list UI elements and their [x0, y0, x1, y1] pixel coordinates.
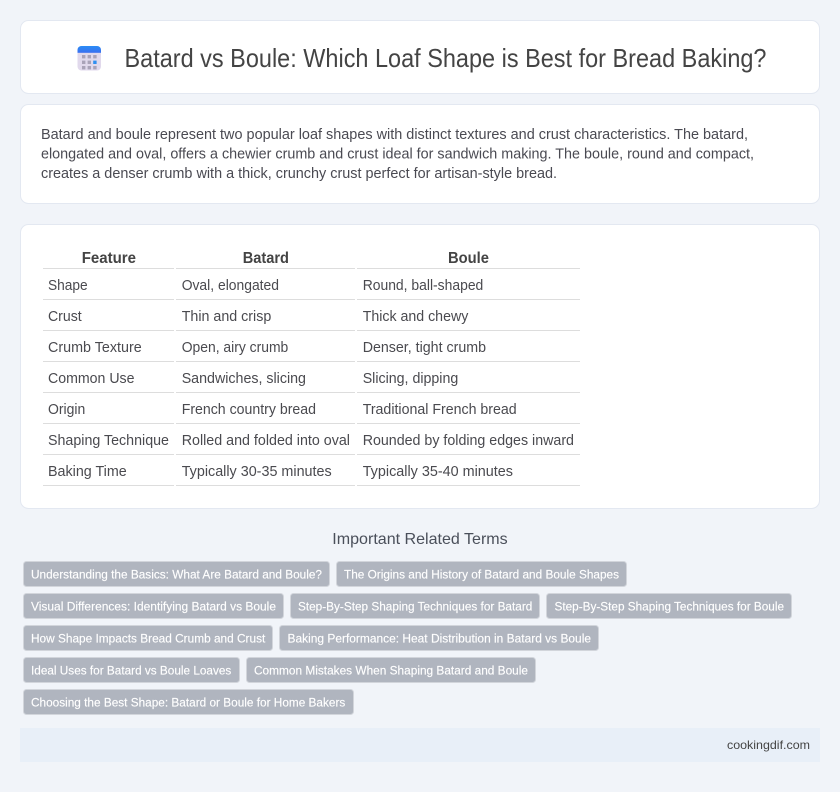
- table row: Crumb Texture: Open, airy crumb: [182, 340, 288, 356]
- table row: Crust: Thick and chewy: [363, 309, 469, 325]
- tag: Origins and History: [336, 562, 626, 586]
- panel: title header: [20, 20, 820, 94]
- table row: Crust: [43, 309, 580, 331]
- tag: Ideal Uses: [24, 658, 240, 682]
- tag: Understanding the Basics: Understanding the Basics: What Are Batard and Boule?: [31, 567, 322, 581]
- tag: Shaping Techniques for Batard: [290, 594, 540, 618]
- table row: Crumb Texture: [43, 340, 580, 362]
- tag: Baking Performance: Baking Performance: Heat Distribution in Batard vs Boule: [288, 631, 591, 645]
- tag: Shaping Techniques for Batard: Step-By-Step Shaping Techniques for Batard: [298, 599, 532, 613]
- heading: Important Related Terms: Important Related Terms: [332, 531, 508, 548]
- table row: Baking Time: Typically 30-35 minutes: [182, 464, 332, 480]
- tag: Baking Performance: [280, 626, 598, 650]
- description text: [41, 127, 754, 182]
- table row: Shaping Technique: Shaping Technique: [48, 433, 169, 449]
- table row: Shaping Technique: Rounded by folding edges inward: [363, 433, 574, 449]
- table row: Crust: Crust: [48, 309, 82, 325]
- tag: Visual Differences: Visual Differences: Identifying Batard vs Boule: [31, 599, 276, 613]
- table row: Shape: [43, 278, 580, 300]
- footer: cookingdif.com: [727, 738, 810, 752]
- table row: Origin: [43, 402, 580, 424]
- table header row: Batard: [243, 250, 289, 267]
- tag: Choosing the Best Shape: [24, 690, 354, 714]
- tag: Shaping Techniques for Boule: [546, 594, 792, 618]
- tag: Understanding the Basics: [24, 562, 330, 586]
- table row: Shaping Technique: [43, 433, 580, 455]
- table row: Shape: Oval, elongated: [182, 278, 279, 294]
- table row: Origin: Traditional French bread: [363, 402, 517, 418]
- icon: calendar: [78, 46, 101, 70]
- table row: Baking Time: Baking Time: [48, 464, 127, 480]
- table header row: Feature: [82, 250, 136, 267]
- panel: description: [20, 104, 820, 204]
- description text: creates a denser crumb with a thick, crunchy crust perfect for artisan-style bread.: [41, 166, 557, 182]
- tag: Origins and History: The Origins and History of Batard and Boule Shapes: [344, 567, 619, 581]
- table row: Baking Time: [43, 464, 580, 486]
- tag: Ideal Uses: Ideal Uses for Batard vs Boule Loaves: [31, 663, 231, 677]
- title: Batard vs Boule: Which Loaf Shape is Best for Bread Baking?: [124, 45, 766, 73]
- table row: Origin: French country bread: [182, 402, 316, 418]
- tag: Shaping Techniques for Boule: Step-By-Step Shaping Techniques for Boule: [554, 599, 784, 613]
- tag: Shape Impacts: How Shape Impacts Bread Crumb and Crust: [31, 631, 266, 645]
- table row: Shaping Technique: Rolled and folded into oval: [182, 433, 350, 449]
- table header row: Boule: [448, 250, 489, 267]
- table row: Shape: Round, ball-shaped: [363, 278, 483, 294]
- table row: Common Use: Sandwiches, slicing: [182, 371, 306, 387]
- panel: related terms tags: [24, 562, 792, 714]
- table row: Origin: Origin: [48, 402, 85, 418]
- table row: Crust: Thin and crisp: [182, 309, 271, 325]
- tag: Common Mistakes: Common Mistakes When Shaping Batard and Boule: [254, 663, 528, 677]
- table row: Shape: Shape: [48, 278, 88, 294]
- tag: Visual Differences: [24, 594, 284, 618]
- table row: Crumb Texture: Denser, tight crumb: [363, 340, 486, 356]
- footer: [20, 728, 820, 762]
- description text: elongated and oval, offers a chewier crumb and crust ideal for sandwich making. The boule, round and compact,: [41, 146, 754, 162]
- table header row: [43, 250, 580, 269]
- tag: Shape Impacts: [24, 626, 272, 650]
- tag: Common Mistakes: [246, 658, 536, 682]
- description text: Batard and boule represent two popular loaf shapes with distinct textures and crust characteristics. The batard,: [41, 127, 748, 143]
- table row: Crumb Texture: Crumb Texture: [48, 340, 142, 356]
- panel: comparison table: [20, 224, 820, 508]
- tag: Choosing the Best Shape: Choosing the Best Shape: Batard or Boule for Home Bakers: [31, 695, 345, 709]
- table row: Common Use: Common Use: [48, 371, 134, 387]
- table row: Common Use: Slicing, dipping: [363, 371, 458, 387]
- table row: Common Use: [43, 371, 580, 393]
- table row: Baking Time: Typically 35-40 minutes: [363, 464, 513, 480]
